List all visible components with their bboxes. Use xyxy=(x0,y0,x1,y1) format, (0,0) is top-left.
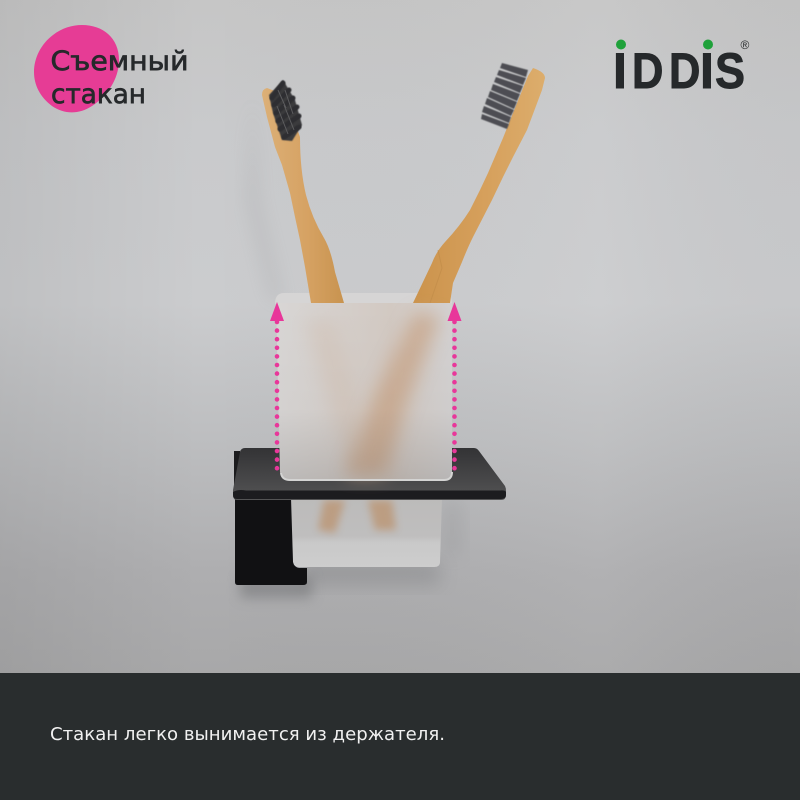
wall shadows xyxy=(240,95,462,598)
left bristle highlights xyxy=(277,90,294,134)
toothbrush: right xyxy=(413,63,545,303)
registered mark: ® xyxy=(740,38,750,52)
blurred handle inside cup xyxy=(345,312,440,475)
logo: IDDIS: D xyxy=(669,43,700,99)
wall bracket xyxy=(235,498,307,585)
caption: Стакан легко вынимается из держателя. xyxy=(50,725,445,745)
logo: IDDIS xyxy=(613,38,750,100)
left bristle tufts xyxy=(272,83,299,137)
logo: IDDIS: I xyxy=(700,43,714,99)
frosted glass cup xyxy=(276,303,452,480)
heading xyxy=(50,46,188,110)
bottom band xyxy=(0,673,800,800)
toothbrush: left xyxy=(262,80,344,303)
right bristles xyxy=(481,63,528,129)
blurred handles in lower cup xyxy=(318,500,345,533)
right handle ridge xyxy=(430,250,442,303)
heading: стакан xyxy=(51,79,146,110)
pink blob behind heading xyxy=(34,25,119,112)
logo: IDDIS: I xyxy=(613,43,627,99)
logo: IDDIS: S xyxy=(715,44,745,100)
arrow: right dotted lift arrow xyxy=(448,302,462,470)
shelf xyxy=(233,448,506,500)
arrow: left dotted lift arrow xyxy=(270,302,284,470)
cup body xyxy=(276,303,452,480)
logo: IDDIS: D xyxy=(632,43,663,99)
cup back rim xyxy=(275,293,452,304)
right handle xyxy=(413,68,545,303)
left handle xyxy=(262,88,344,303)
left bristles base xyxy=(269,80,302,141)
logo green dots xyxy=(616,40,713,50)
cup bottom shade xyxy=(276,303,452,480)
heading: Съемный xyxy=(50,46,188,77)
lower cup below shelf xyxy=(291,498,442,567)
cup base edge xyxy=(281,472,452,480)
